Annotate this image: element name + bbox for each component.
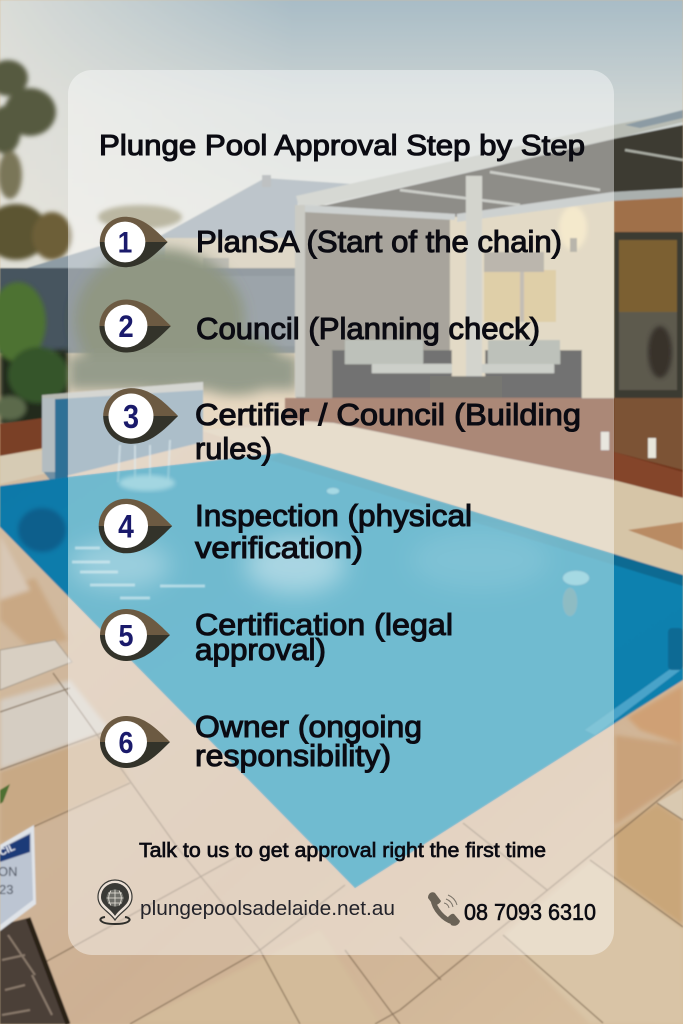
pergola roof	[305, 125, 683, 217]
marker 5	[100, 609, 170, 661]
marker 3: 3	[123, 399, 139, 436]
marker 6: 6	[119, 725, 133, 760]
paving	[0, 420, 683, 1024]
trees at left	[0, 60, 182, 260]
marker 1: 1	[118, 227, 132, 260]
step 6: responsibility)	[195, 738, 391, 773]
coloured paver patches	[0, 535, 683, 1024]
step 4	[99, 498, 472, 565]
marker 3	[103, 388, 178, 444]
call to action: Talk to us to get approval right the first time	[139, 839, 546, 862]
marker 4	[99, 499, 172, 553]
timber planter	[0, 418, 43, 456]
paver joints	[0, 673, 683, 1024]
step 3	[103, 388, 581, 466]
step 3 label: Certifier / Council (Building	[195, 397, 581, 432]
council sign	[0, 825, 36, 931]
bushes	[68, 248, 298, 395]
step 2 label: Council (Planning check)	[196, 311, 540, 346]
title: Plunge Pool Approval Step by Step	[99, 130, 585, 162]
step 6	[100, 709, 422, 773]
fence	[0, 268, 300, 353]
pool lights	[563, 571, 589, 585]
step 5	[100, 607, 453, 667]
pergola posts	[466, 176, 482, 402]
pool tint and ripples seen through the panel	[68, 453, 614, 888]
patio back wall	[296, 205, 683, 405]
outdoor sofa	[332, 350, 452, 398]
left garden shrubs	[0, 282, 68, 425]
step 5 label: Certification (legal	[195, 607, 453, 642]
icon: phone handset	[428, 892, 460, 926]
marker 2: 2	[118, 308, 134, 344]
phone number: 08 7093 6310	[464, 899, 596, 925]
step 2	[99, 299, 540, 353]
website: plungepoolsadelaide.net.au	[140, 898, 395, 920]
step 3: rules)	[195, 431, 272, 466]
step 4: verification)	[195, 530, 363, 565]
step 1	[100, 217, 562, 267]
garden mulch bed	[0, 918, 70, 1024]
marker 2	[99, 299, 171, 353]
step 4 label: Inspection (physical	[195, 498, 472, 533]
rear house roof	[20, 178, 352, 275]
glass door	[614, 232, 683, 398]
translucent content panel	[68, 70, 614, 955]
step 5: approval)	[195, 632, 326, 667]
pool water	[0, 453, 683, 888]
marker 5: 5	[119, 618, 133, 653]
step 1 label: PlanSA (Start of the chain)	[196, 224, 562, 259]
marker 4: 4	[118, 509, 134, 545]
marker 6	[100, 716, 170, 768]
marker 1	[100, 217, 168, 267]
water feature wall	[42, 385, 203, 480]
timber deck	[285, 398, 683, 498]
step 6 label: Owner (ongoing	[195, 709, 422, 744]
icon: globe location pin	[98, 880, 132, 924]
